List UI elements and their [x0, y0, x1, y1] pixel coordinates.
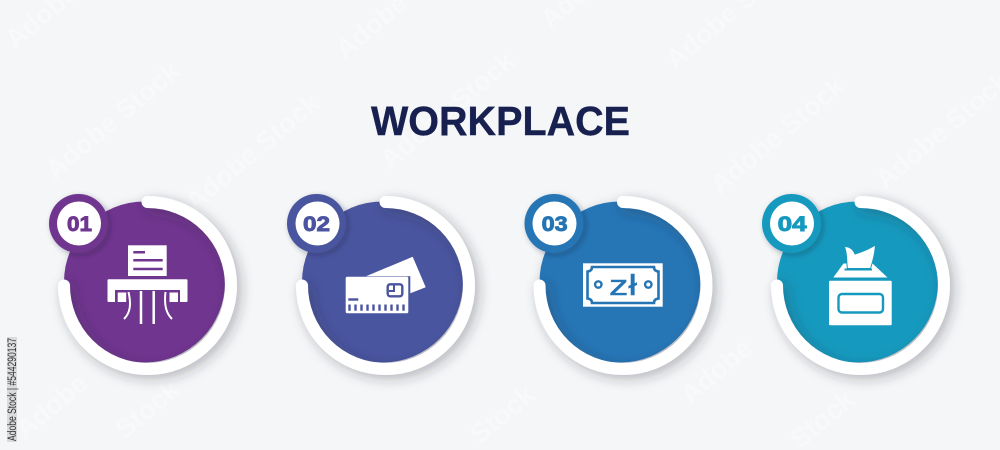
number badge 03: 03 — [542, 213, 568, 236]
stock credit label: Adobe Stock | #544290137 — [7, 338, 19, 441]
watermark pattern: Adobe — [675, 333, 758, 410]
watermark pattern: Adobe Stock — [40, 55, 186, 185]
number badge 02 — [287, 194, 346, 253]
number badge 02: 02 — [303, 213, 330, 236]
number badge 01 — [49, 194, 108, 253]
watermark pattern: Adobe Stock — [375, 45, 521, 175]
panel: 01 shredder — [49, 194, 231, 369]
icon: credit cards — [346, 257, 426, 313]
white progress arc 02 — [302, 202, 469, 369]
icon: banknote: zł — [609, 270, 638, 302]
icon: tissue box — [829, 245, 892, 325]
watermark pattern: Adobe Stock — [705, 70, 851, 200]
title: WORKPLACE — [371, 98, 630, 144]
watermark pattern: Stock — [465, 379, 541, 450]
white progress arc 01 — [64, 202, 231, 369]
panel: 02 credit card — [287, 194, 469, 369]
panel: 04 tissue box — [762, 194, 944, 369]
watermark pattern: Adobe — [10, 368, 93, 445]
number badge 04 — [762, 194, 821, 253]
white progress arc 04 — [777, 202, 944, 369]
panel: 03 zloty banknote — [524, 194, 707, 369]
number badge 01: 01 — [67, 213, 92, 236]
number badge 03 — [524, 194, 584, 253]
icon: paper shredder — [108, 245, 188, 324]
white progress arc 03 — [540, 202, 707, 369]
watermark pattern: Adobe Stock — [180, 87, 326, 217]
watermark pattern: Stock — [110, 374, 186, 445]
icon: banknote — [583, 263, 663, 307]
number badge 04: 04 — [778, 213, 807, 236]
